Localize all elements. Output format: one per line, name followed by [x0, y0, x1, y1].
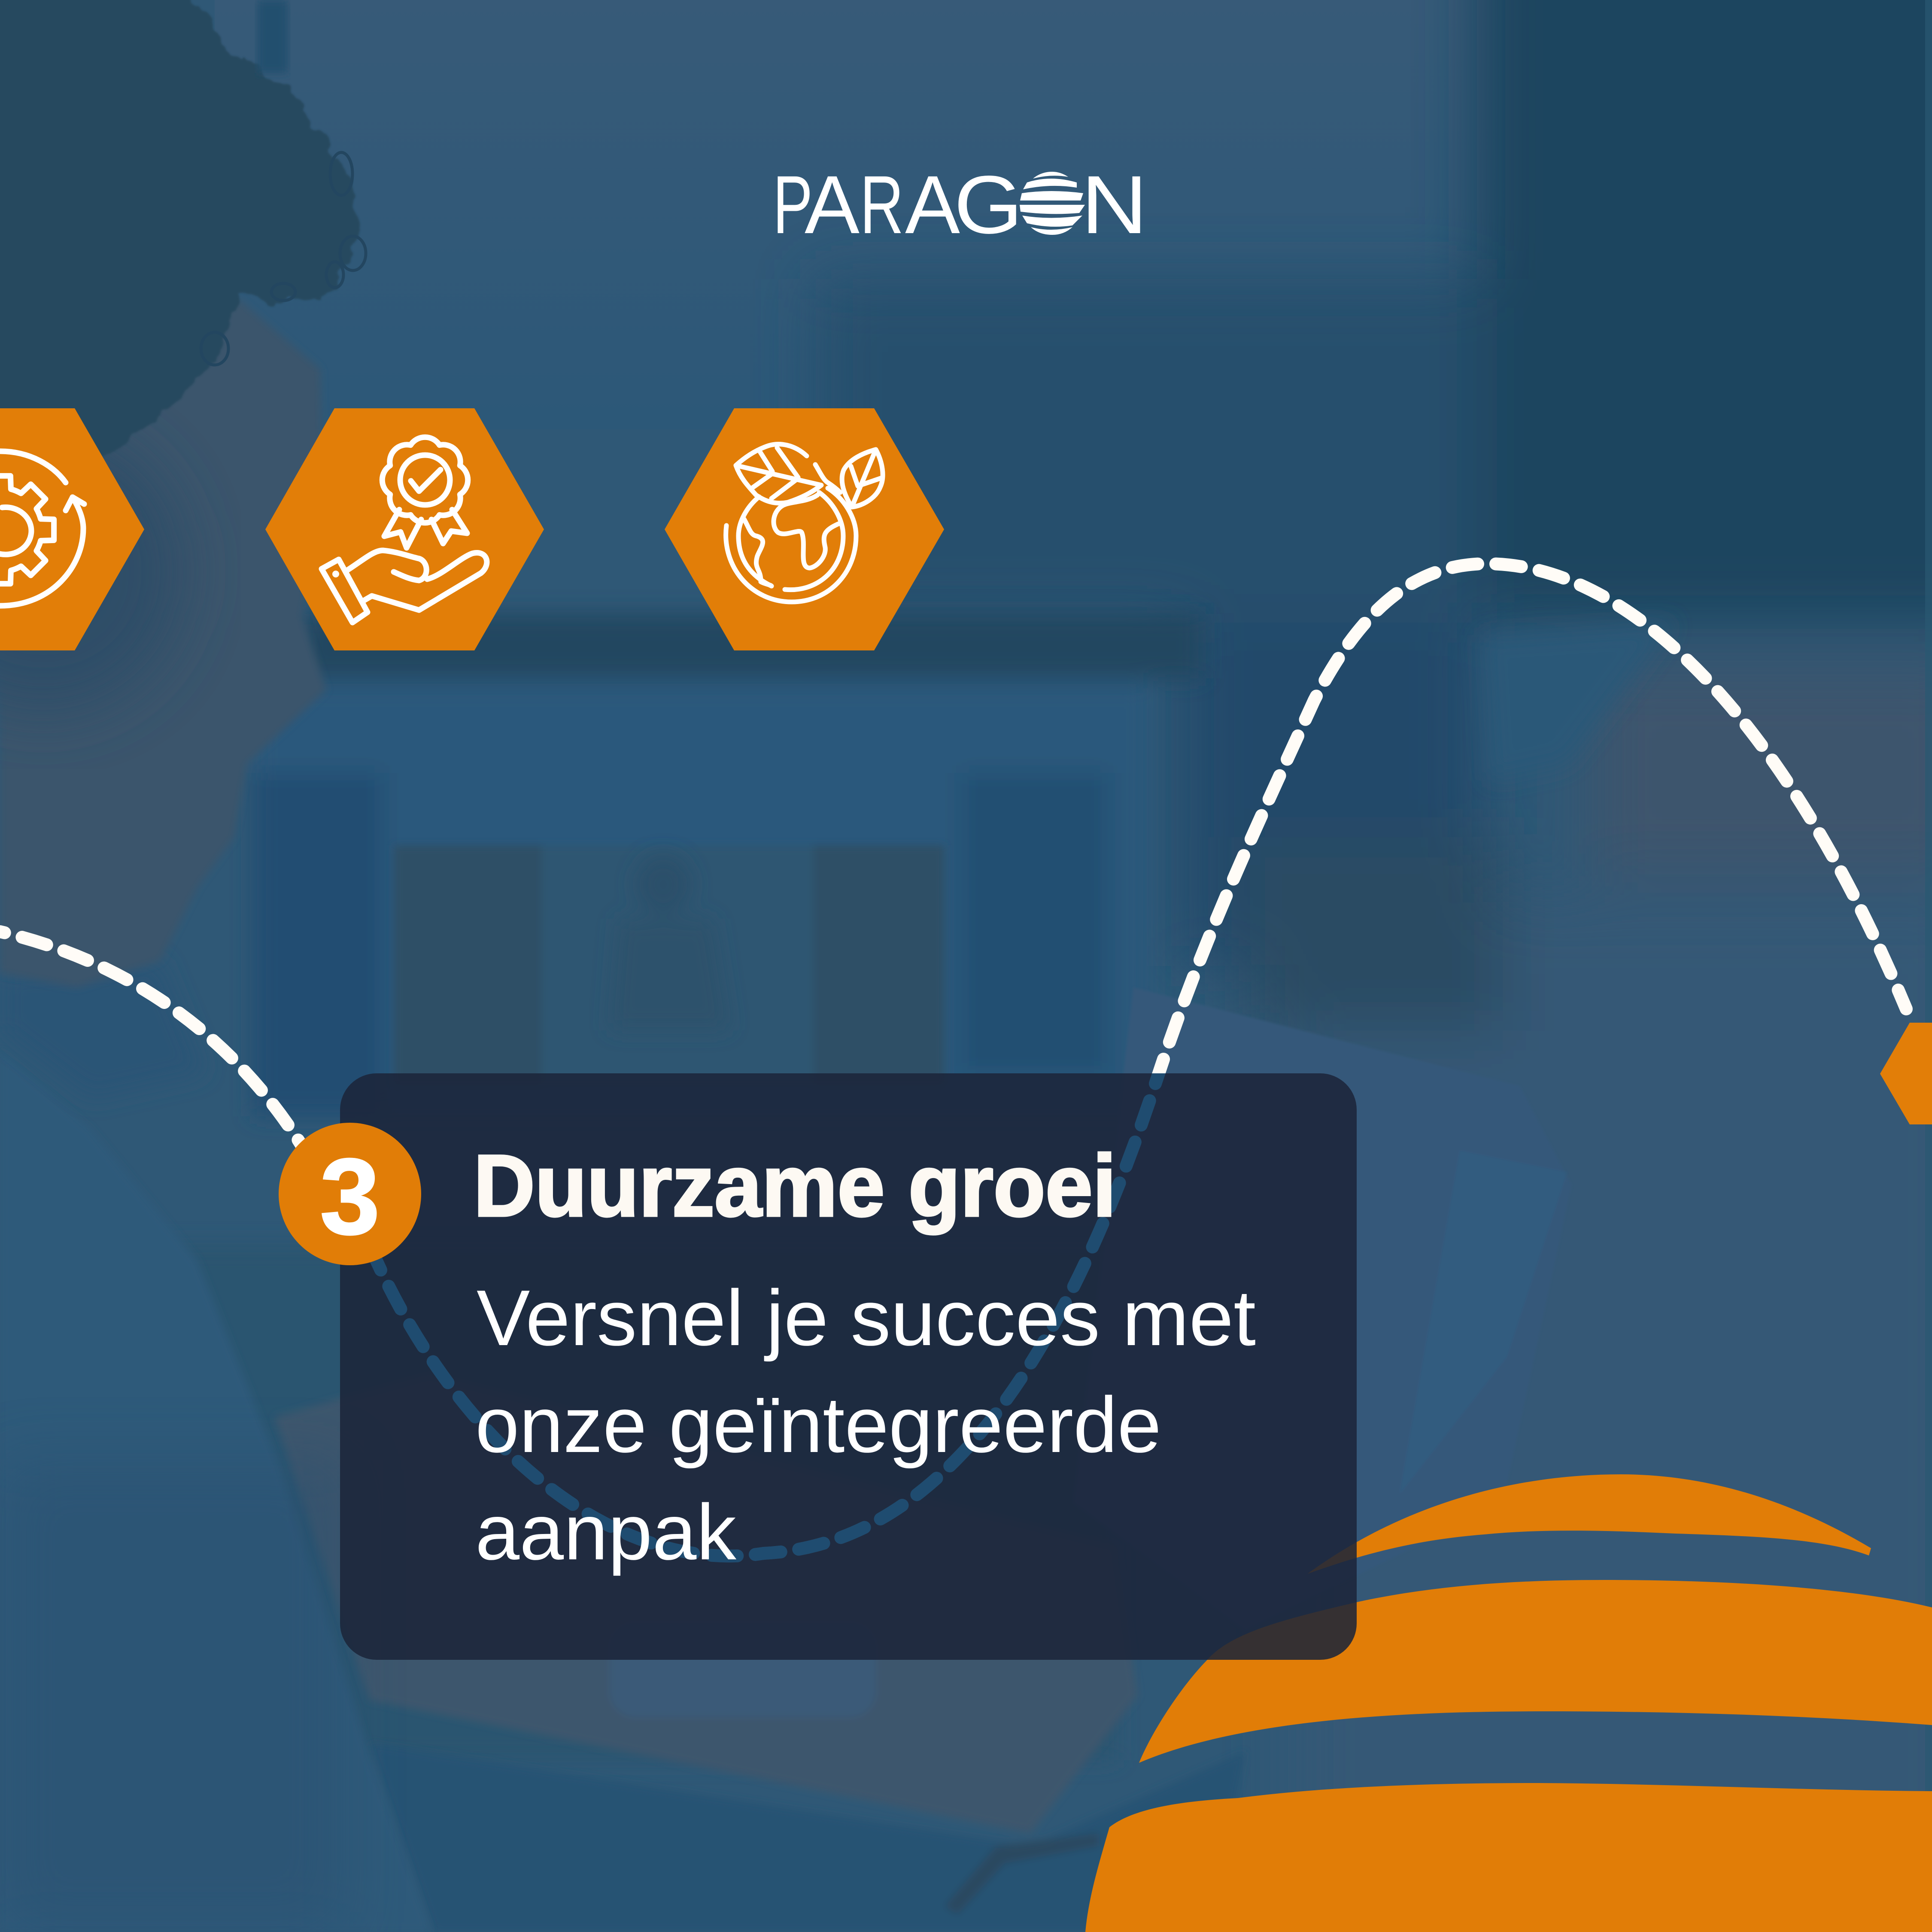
orange swoosh shapes: [1085, 1474, 1932, 1932]
logo: PARAGON: P: [773, 158, 813, 251]
paper on desk: [1073, 987, 1571, 1631]
person left: body: [0, 1051, 431, 1932]
body text: Versnel je succes met: [477, 1273, 1256, 1362]
logo: PARAGON: A: [905, 158, 960, 251]
logo: PARAGON: N: [1081, 158, 1148, 251]
logo: PARAGON: G: [954, 158, 1023, 251]
panel: step 3 card: [0, 564, 1487, 1660]
heading: Duurzame groei: [474, 1137, 1116, 1235]
logo: PARAGON: [773, 158, 1148, 251]
person left: curly hair: [0, 0, 366, 502]
person left: face: [0, 301, 326, 987]
icon: partial hexagon at end of route: [1880, 1023, 1932, 1124]
body text: [475, 1273, 1256, 1576]
logo: PARAGON: A: [805, 158, 860, 251]
monitor picture: [394, 845, 945, 1086]
dashed route line: [0, 564, 1906, 1556]
number badge 3: [279, 1123, 421, 1265]
icon: globe with leaves hexagon: [665, 408, 944, 650]
desk and notebook: [275, 1374, 1245, 1932]
icon: hand with award rosette hexagon: [265, 408, 544, 650]
number badge 3: 3: [320, 1136, 380, 1257]
route line seen through panel: [0, 564, 1487, 1556]
body text: onze geïntegreerde: [475, 1380, 1161, 1469]
icon: gear with circular arrow hexagon: [0, 408, 144, 650]
body text: aanpak: [475, 1488, 737, 1576]
logo: PARAGON: R: [860, 158, 904, 251]
